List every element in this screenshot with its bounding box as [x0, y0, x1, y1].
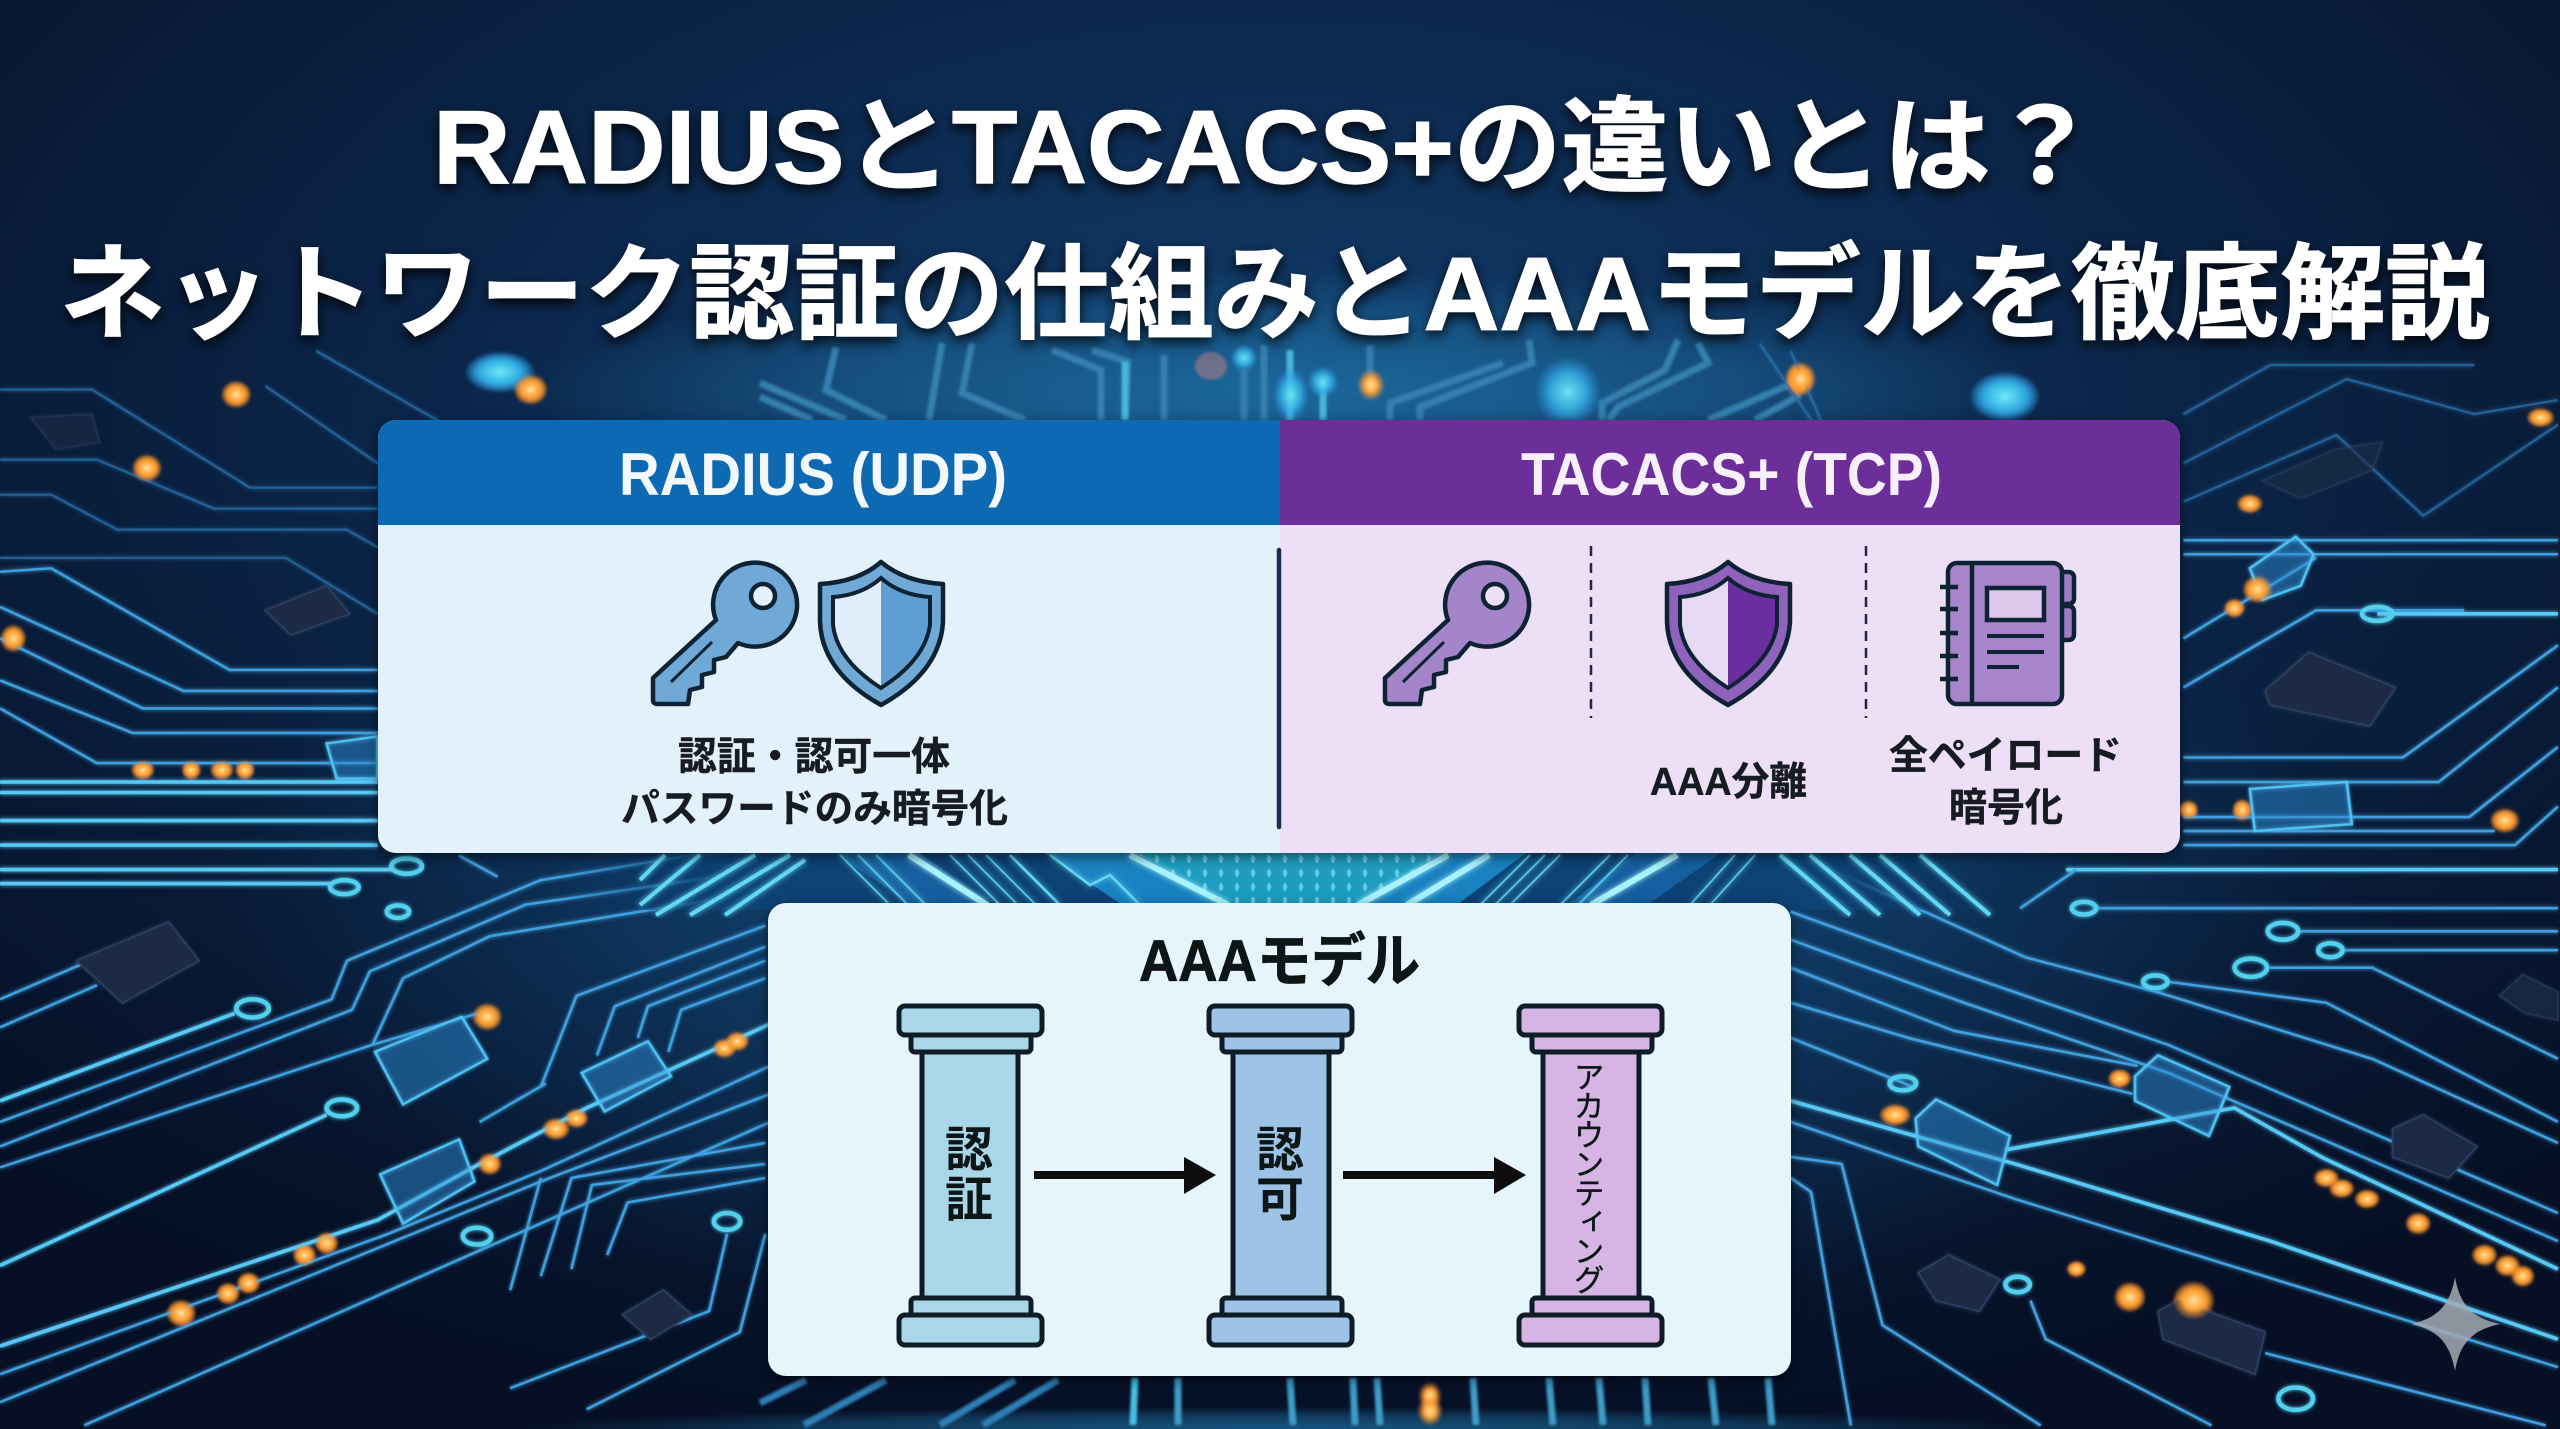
circuit traces: left side: [0, 351, 800, 1425]
text: RADIUS features: パスワードのみ暗号化: [621, 788, 1008, 831]
pillar: authentication: 証: [945, 1174, 993, 1227]
arrow: authentication to authorization: [1034, 1157, 1216, 1194]
pillar: authorization: [1209, 1006, 1352, 1345]
circuit traces: upper centre: [760, 340, 1809, 428]
title line 1: RADIUSとTACACS+の違いとは？: [433, 90, 2098, 206]
circuit traces: right side: [1760, 344, 2558, 1425]
text: full payload encryption: [1889, 735, 2122, 830]
circuit traces: strip between panels: [560, 850, 2000, 915]
text: RADIUS features: 認証・認可一体: [678, 736, 950, 779]
pillar: authentication: [899, 1006, 1042, 1345]
icon: TACACS key: [1385, 563, 1529, 704]
title: [60, 90, 2490, 353]
pillar: authorization: 可: [1256, 1174, 1304, 1227]
icon: notebook: [1940, 563, 2074, 704]
arrow: authorization to accounting: [1343, 1157, 1526, 1194]
panel: protocol comparison: [378, 420, 2180, 853]
divider: [1277, 550, 1281, 827]
text: RADIUS features: [621, 736, 1008, 831]
text: full payload encryption: 全ペイロード: [1889, 735, 2122, 778]
icon: RADIUS key: [653, 563, 797, 704]
text: AAA separation: AAA分離: [1650, 761, 1807, 804]
title line 2: ネットワーク認証の仕組みとAAAモデルを徹底解説: [60, 237, 2490, 353]
heading: AAA model: AAAモデル: [1139, 929, 1420, 994]
pillar: accounting: [1519, 1006, 1662, 1345]
heading: TACACS+: TACACS+ (TCP): [1521, 441, 1942, 508]
pillar: authorization: 認: [1256, 1124, 1304, 1177]
pillar: authentication: 認: [945, 1124, 993, 1177]
panel: AAA model: [768, 903, 1791, 1376]
heading: RADIUS: RADIUS (UDP): [619, 441, 1007, 508]
pillar: accounting: アカウンティング: [1568, 1061, 1604, 1294]
icon: sparkle watermark: [2411, 1277, 2500, 1371]
circuit traces: bottom centre: [760, 1378, 1772, 1426]
text: full payload encryption: 暗号化: [1949, 787, 2063, 830]
icon: TACACS shield: [1667, 562, 1790, 705]
icon: RADIUS shield: [820, 562, 943, 705]
